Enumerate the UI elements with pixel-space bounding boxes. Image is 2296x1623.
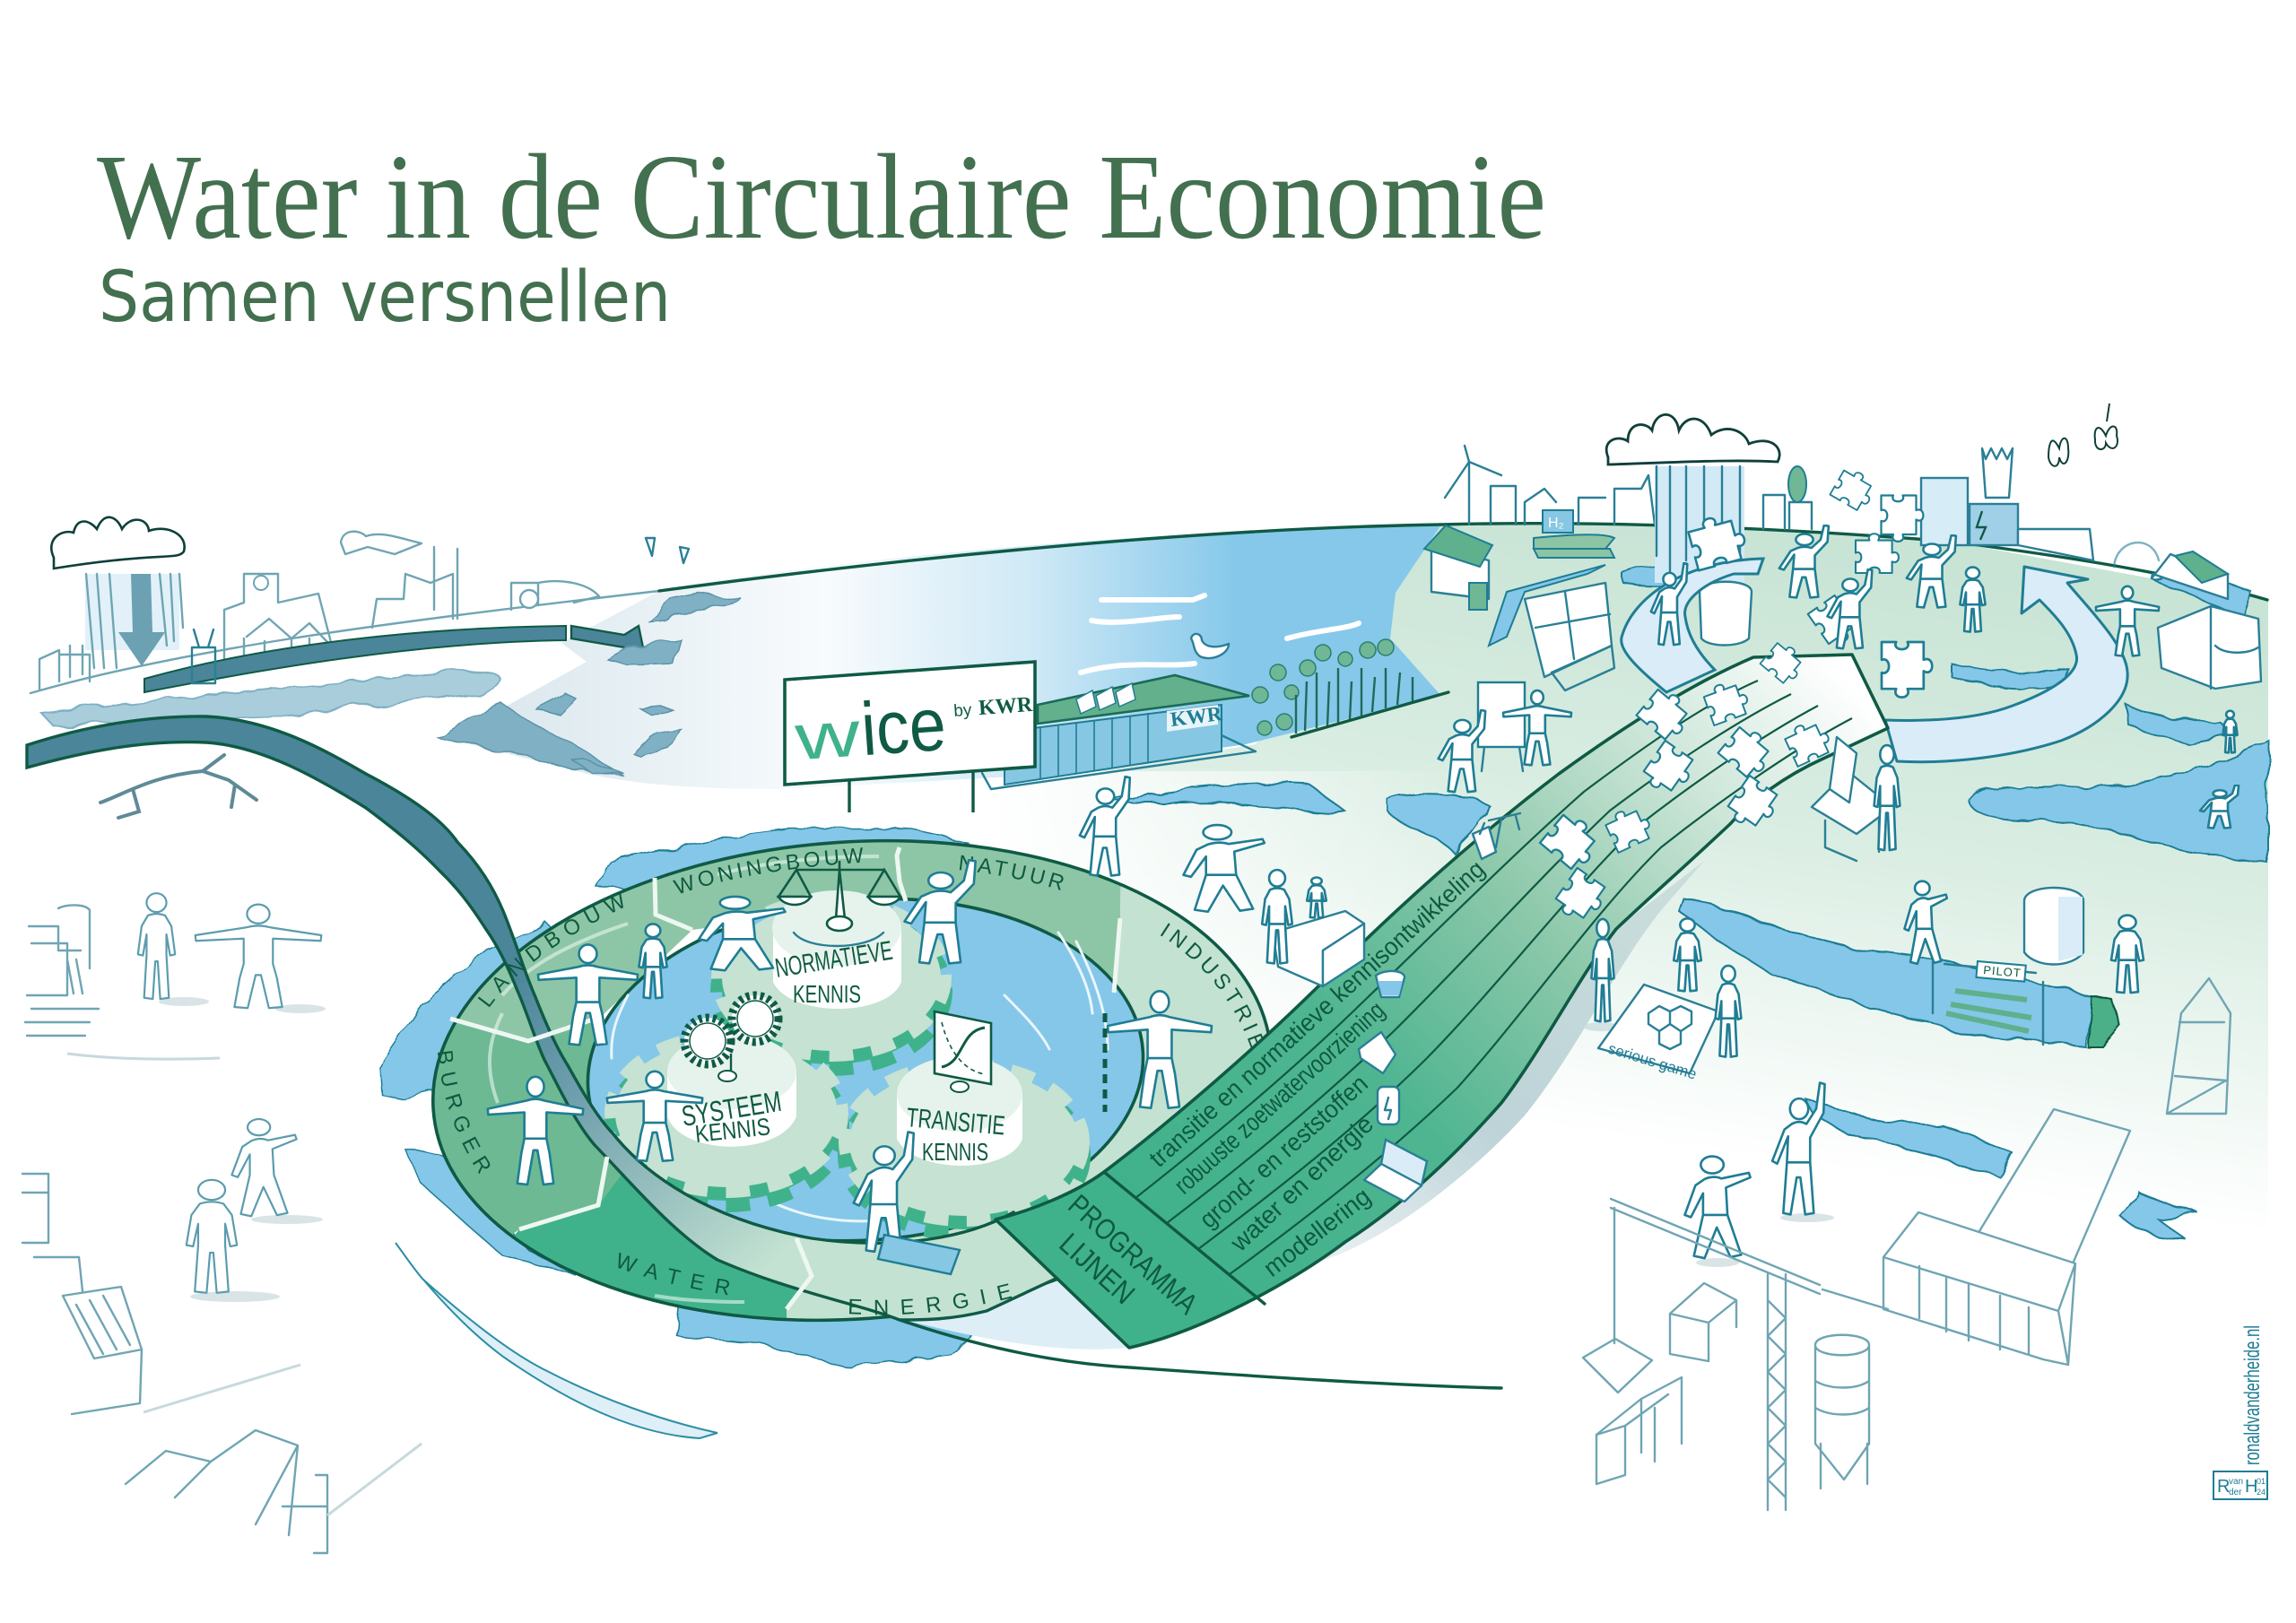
houses east bbox=[2152, 554, 2228, 599]
power building bbox=[1970, 504, 2018, 545]
wice billboard bbox=[785, 662, 1037, 812]
greenhouse bbox=[1525, 583, 1614, 690]
pale wedge under ring bbox=[897, 1273, 1129, 1350]
puzzle piece bbox=[1760, 638, 1808, 687]
pond: strip bbox=[2126, 704, 2233, 744]
label: lane 3: grond- en reststoffen bbox=[1194, 1069, 1373, 1233]
shoreline bbox=[1292, 692, 1448, 737]
ponds bbox=[1107, 563, 2268, 1242]
serious game board: serious game bbox=[1606, 1040, 1699, 1083]
soft arcs on ring bbox=[490, 856, 879, 1302]
people shadows bbox=[159, 997, 1834, 1302]
drum top bbox=[1700, 582, 1752, 646]
person: woman lower left bbox=[231, 1119, 297, 1216]
puzzle piece held bbox=[1686, 511, 1749, 570]
arrow: rain down bbox=[118, 574, 165, 666]
base terrace bbox=[982, 735, 1256, 789]
low building bbox=[2018, 529, 2093, 560]
lane lines bbox=[1135, 681, 1852, 1274]
label: lane 2: robuuste zoetwatervoorziening bbox=[1169, 996, 1390, 1199]
pond: north east bbox=[2152, 569, 2251, 619]
person: woman with puzzle bbox=[1651, 563, 1687, 645]
left land: rain cloud, city and factory bbox=[39, 517, 644, 726]
cylinder: transitie kennis: KENNIS bbox=[922, 1138, 988, 1166]
person: man at game bbox=[1716, 966, 1741, 1057]
person: woman arm up south bbox=[1772, 1083, 1825, 1214]
label: ENERGIE: ENERGIE bbox=[849, 1283, 1012, 1315]
icon: soil box bbox=[1359, 1032, 1396, 1073]
sector: WATER bbox=[515, 1175, 798, 1318]
cylinder: systeem kennis: KENNIS bbox=[693, 1113, 771, 1148]
person: man by band bbox=[1591, 919, 1614, 1021]
icon: flipchart curve bbox=[935, 1011, 991, 1092]
person: farmer bbox=[538, 944, 638, 1045]
person: woman at flipchart bbox=[1503, 690, 1571, 765]
circular arrow bbox=[1622, 559, 2127, 762]
sketch: factory bbox=[341, 532, 457, 628]
heading: PROGRAMMA LIJNEN bbox=[1053, 1188, 1205, 1321]
bush: north bbox=[597, 829, 969, 892]
person: woman with sign bbox=[1960, 568, 1986, 632]
person: scientist bbox=[1262, 870, 1292, 964]
divider: water and energie bbox=[787, 1238, 812, 1309]
sketch: factory west bbox=[25, 905, 99, 1036]
flipchart bbox=[1478, 682, 1525, 771]
butterflies left bbox=[646, 538, 689, 563]
stamp: 01 bbox=[2257, 1477, 2266, 1486]
sector: BURGER bbox=[434, 1022, 621, 1234]
icon: rain cloud bbox=[51, 517, 185, 668]
green land area, right bbox=[987, 525, 2268, 1273]
puzzle piece bbox=[1552, 868, 1611, 927]
sectors bbox=[434, 842, 1266, 1319]
heading: PROGRAMMA LIJNEN: PROGRAMMA bbox=[1062, 1188, 1205, 1321]
divider: landbouw and woningbouw bbox=[655, 878, 692, 930]
water ring surroundings bbox=[379, 829, 996, 1367]
ripples bbox=[612, 933, 1108, 1221]
divider: burger and water bbox=[519, 1157, 607, 1229]
sketch: low frames bbox=[126, 1430, 327, 1553]
lane icons bbox=[1359, 813, 1520, 1202]
crack in ground bbox=[100, 755, 257, 818]
person: man by drum bbox=[2111, 916, 2144, 993]
gear: transitie bbox=[849, 1069, 1079, 1229]
drum south bbox=[2024, 888, 2083, 965]
puzzle piece bbox=[1639, 741, 1699, 800]
cylinder: normatieve kennis: NORMATIEVE bbox=[773, 936, 894, 984]
sketch: big west building bbox=[34, 1257, 142, 1414]
logo: ice bbox=[858, 681, 949, 771]
person: woman by canal bbox=[1905, 881, 1947, 964]
person: burger bbox=[488, 1077, 583, 1185]
signature bbox=[2213, 1325, 2267, 1499]
puzzle pieces bbox=[1540, 465, 1932, 927]
cylinder: systeem kennis bbox=[667, 995, 796, 1148]
label: lane 4: water en energie bbox=[1224, 1110, 1378, 1257]
sector: ENERGIE bbox=[787, 1228, 967, 1319]
thin tail line bbox=[900, 1320, 1501, 1388]
gear: normatieve bbox=[722, 904, 941, 1064]
pond: big east bbox=[1967, 740, 2268, 864]
logo: by bbox=[953, 701, 973, 721]
puzzle piece bbox=[1637, 684, 1696, 743]
label: WATER: WATER bbox=[619, 1252, 729, 1295]
person: worker transitie bbox=[854, 1132, 914, 1252]
divider: natuur and industrie bbox=[1114, 918, 1120, 993]
H2 box: H₂ bbox=[1548, 516, 1564, 531]
person: man holding puzzle bbox=[1827, 569, 1872, 648]
reed and lily pads bbox=[1252, 639, 1448, 737]
pond: near flipchart bbox=[1388, 794, 1491, 852]
logo bbox=[791, 675, 1037, 776]
person: man above ring bbox=[1080, 777, 1130, 876]
horizon line west bbox=[30, 591, 659, 693]
label: LANDBOUW: LANDBOUW bbox=[477, 893, 623, 1008]
gear: systeem bbox=[615, 1040, 838, 1201]
label: lane 5: modellering bbox=[1258, 1182, 1376, 1282]
sector: WONINGBOUW bbox=[657, 842, 902, 930]
sector: LANDBOUW bbox=[459, 881, 692, 1038]
person: desk worker bbox=[1874, 745, 1900, 850]
arc: left part bbox=[1622, 559, 1763, 692]
puzzle piece bbox=[1718, 722, 1778, 781]
sector: INDUSTRIE bbox=[1065, 886, 1266, 1193]
hut with green roof bbox=[1424, 525, 1492, 610]
person: child bbox=[1307, 877, 1326, 918]
person: woman left bbox=[138, 893, 175, 999]
divider: burger and landbouw bbox=[450, 1017, 601, 1041]
icon: laptop bbox=[1364, 1140, 1427, 1202]
stamp: der bbox=[2229, 1488, 2242, 1497]
heading: PROGRAMMA LIJNEN: LIJNEN bbox=[1053, 1227, 1142, 1310]
people bbox=[138, 525, 2239, 1293]
pond: middle bbox=[1107, 784, 1345, 812]
board bbox=[785, 662, 1035, 785]
butterfly two bbox=[2095, 404, 2118, 449]
panel: sector ring bbox=[430, 839, 1270, 1322]
person: woman at game bbox=[1674, 918, 1701, 991]
green patch by canal bbox=[2088, 995, 2121, 1047]
buildings left bbox=[1491, 475, 1655, 525]
subtitle: Samen versnellen bbox=[99, 257, 671, 338]
dome bbox=[2114, 542, 2159, 567]
title: Water in de Circulaire Economie bbox=[97, 130, 1546, 265]
stamp: van bbox=[2229, 1477, 2243, 1487]
serious game board bbox=[1598, 985, 1718, 1083]
person: presenter bbox=[1439, 710, 1485, 792]
pond: far right bbox=[2122, 1193, 2197, 1242]
puzzle piece bbox=[1724, 776, 1783, 835]
lily pads bbox=[1252, 639, 1394, 735]
person: man cap south bbox=[1684, 1157, 1751, 1258]
water pool bbox=[577, 881, 1154, 1259]
pilot sign: PILOT bbox=[1983, 963, 2022, 980]
reeds bbox=[1296, 668, 1413, 733]
pond: mid in circle bbox=[1952, 664, 2067, 689]
posts bbox=[849, 762, 973, 812]
sector dividers bbox=[450, 847, 1120, 1309]
arc: right part bbox=[1885, 567, 2127, 762]
icon: scale and chart bbox=[1473, 813, 1520, 859]
puzzle piece bbox=[1540, 810, 1605, 873]
facade bbox=[1004, 705, 1222, 785]
north skyline bbox=[1424, 404, 2261, 690]
ground strokes bbox=[67, 1054, 422, 1515]
puzzle piece bbox=[1782, 716, 1834, 767]
sketch: south-east buildings bbox=[1583, 978, 2231, 1510]
stamp: H bbox=[2245, 1477, 2257, 1497]
icon: measuring pole bbox=[1103, 1013, 1107, 1112]
sketch: south-west buildings bbox=[22, 755, 422, 1553]
puzzle piece sky bbox=[1830, 465, 1879, 513]
sign KWR on building: KWR bbox=[1170, 702, 1223, 731]
person: man left arms out bbox=[196, 905, 321, 1008]
person: woman pointing bbox=[1184, 825, 1265, 912]
cylinder: transitie kennis: TRANSITIE bbox=[905, 1103, 1006, 1141]
river lens south-west bbox=[396, 1243, 718, 1438]
band body bbox=[996, 655, 1888, 1348]
sketch: hospital bbox=[224, 574, 332, 659]
person: woman in pool bbox=[607, 1072, 702, 1161]
band shadow bbox=[1309, 861, 1704, 1264]
wetland bbox=[41, 671, 501, 726]
pilot sign bbox=[1933, 961, 2043, 1045]
puzzle piece bbox=[1882, 642, 1932, 698]
ring labels bbox=[438, 847, 1263, 1315]
sketch: houses bbox=[1596, 1377, 1682, 1484]
lake bbox=[443, 525, 1441, 789]
person: nature guide bbox=[905, 860, 976, 963]
plant beds bbox=[1534, 534, 1614, 558]
url text: ronaldvanderheide.nl bbox=[2240, 1325, 2265, 1465]
cylinder: systeem kennis: SYSTEEM bbox=[679, 1085, 784, 1133]
label: INDUSTRIE: INDUSTRIE bbox=[1161, 923, 1263, 1047]
cloud and rain bbox=[1606, 414, 1779, 583]
gears bbox=[615, 904, 1079, 1229]
stamp: R bbox=[2217, 1477, 2230, 1497]
sketch: small west building bbox=[22, 1174, 48, 1243]
KWR building bbox=[982, 675, 1256, 789]
puzzle piece sky bbox=[1882, 495, 1923, 542]
east tank bbox=[2158, 606, 2261, 689]
outer edge bbox=[417, 813, 1287, 1348]
person: man lower left bbox=[187, 1180, 237, 1293]
facade mullions bbox=[1040, 713, 1148, 778]
stream bbox=[1489, 565, 1605, 646]
green house roof bbox=[2175, 551, 2228, 583]
icon: wind turbine bbox=[1445, 446, 1501, 525]
cylinders with knowledge labels bbox=[667, 861, 1022, 1166]
icon: bucket bbox=[1376, 971, 1405, 997]
sketch: L-shaped building bbox=[1883, 1109, 2130, 1365]
tree bbox=[1788, 466, 1806, 502]
person: builder bbox=[699, 897, 786, 970]
program arrow band bbox=[996, 465, 1932, 1348]
icon: solar panel bbox=[878, 1235, 960, 1274]
icon: duck bbox=[1191, 634, 1229, 658]
cylinder: normatieve kennis: KENNIS bbox=[793, 980, 861, 1008]
bush: west bbox=[379, 924, 574, 1098]
pond: north bbox=[1623, 563, 1704, 586]
islands bbox=[438, 594, 742, 776]
person: binocular man bbox=[1779, 525, 1829, 597]
puzzle piece held bbox=[1808, 592, 1865, 649]
logo: w bbox=[792, 698, 864, 774]
icon: battery bbox=[1378, 1087, 1399, 1124]
arrow: dark band across land bbox=[144, 626, 566, 692]
lake details: islands and clouds bbox=[438, 538, 1359, 776]
sketch: tractor bbox=[511, 581, 599, 610]
sketch: table frame bbox=[1670, 1283, 1736, 1361]
ribbon: water flow bbox=[27, 716, 1067, 1320]
lane labels bbox=[1144, 855, 1490, 1282]
land fade to the west bbox=[987, 771, 1471, 1273]
arrow head bbox=[571, 626, 644, 652]
pond: south bbox=[1805, 1098, 2012, 1177]
buildings right of rain bbox=[1763, 495, 1812, 529]
person: site worker bbox=[2096, 586, 2159, 655]
H2 box bbox=[1543, 510, 1573, 533]
header separator bbox=[1104, 1172, 1265, 1304]
icon: sprout post bbox=[192, 629, 215, 683]
person: industry man bbox=[1108, 991, 1212, 1108]
person: tie man bbox=[1907, 535, 1956, 607]
label: WONINGBOUW: WONINGBOUW bbox=[673, 847, 863, 893]
cylinder: normatieve kennis bbox=[772, 861, 901, 1009]
logo: KWR bbox=[978, 693, 1034, 720]
sketch: crane bbox=[1583, 1199, 1888, 1510]
label: NATUUR: NATUUR bbox=[960, 855, 1064, 890]
lab table bbox=[1273, 911, 1364, 986]
bush: south-west bbox=[404, 1148, 574, 1273]
glass tower bbox=[1921, 478, 1968, 545]
sector: NATUUR bbox=[899, 843, 1121, 979]
green roof bbox=[1038, 675, 1249, 724]
divider: woningbouw and natuur bbox=[897, 847, 906, 901]
sketch: church tower bbox=[2167, 978, 2231, 1114]
desk with screens bbox=[1812, 737, 1892, 861]
bush: south bbox=[677, 1291, 996, 1367]
icon: scale bbox=[778, 861, 900, 931]
canal bbox=[1677, 897, 2091, 1046]
puzzle piece bbox=[1701, 678, 1752, 725]
sketch: left skyline bbox=[39, 646, 90, 690]
label: BURGER: BURGER bbox=[438, 1051, 490, 1175]
horizon line bbox=[659, 524, 2267, 600]
butterfly one bbox=[2048, 438, 2068, 466]
solar panels on roof bbox=[1076, 683, 1135, 714]
cylinder: transitie kennis bbox=[897, 1011, 1022, 1166]
puzzle piece held bbox=[1856, 534, 1899, 573]
person: field worker bbox=[639, 924, 667, 998]
stamp bbox=[2213, 1471, 2267, 1499]
stamp: 24 bbox=[2257, 1488, 2266, 1497]
sketch: silo bbox=[1815, 1335, 1869, 1488]
water tower bbox=[1982, 448, 2013, 498]
person: swimmer bbox=[2200, 785, 2239, 829]
person: raft person bbox=[2222, 711, 2238, 752]
puzzle piece bbox=[1603, 803, 1655, 853]
label: lane 1: transitie en normatieve kennisontwikkeling bbox=[1144, 855, 1490, 1172]
wave highlights bbox=[1081, 595, 1359, 673]
icon: cogs bbox=[684, 995, 778, 1081]
